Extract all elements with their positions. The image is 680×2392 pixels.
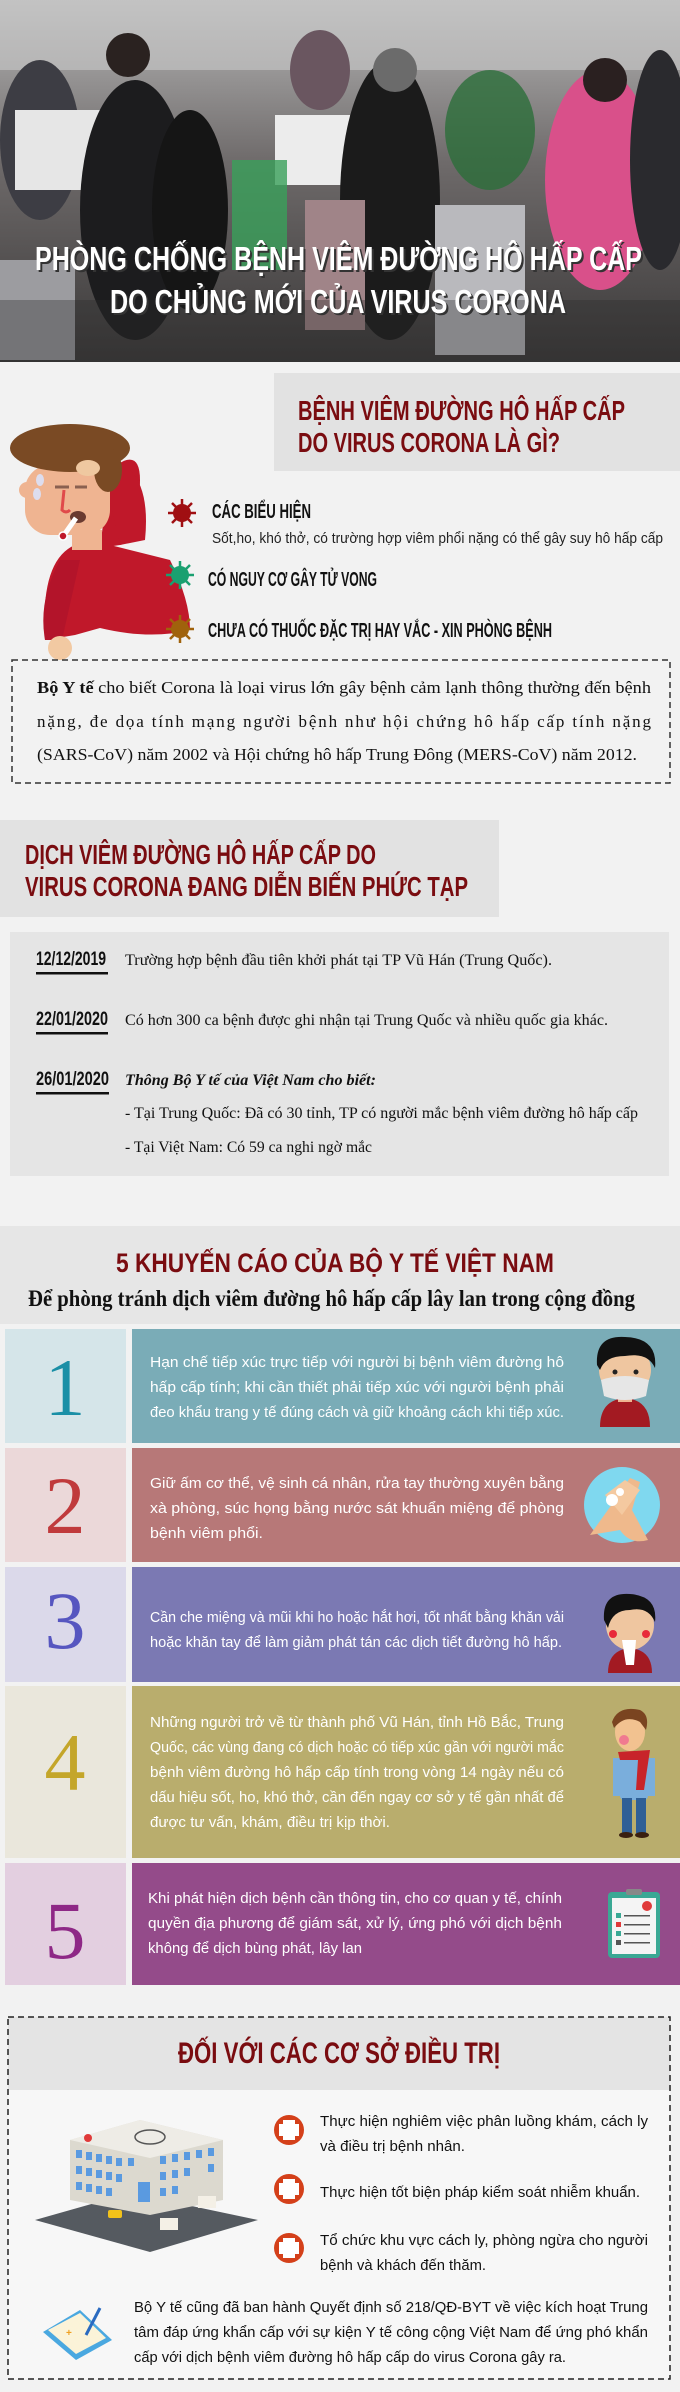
timeline item 1: Trường hợp bệnh đầu tiên khởi phát tại TP Vũ Hán (Trung Quốc). xyxy=(125,952,552,969)
icon: sick man with scarf xyxy=(612,1709,655,1838)
panel: recommendation 2: xà phòng, súc họng bằng nước sát khuẩn miệng để phòng xyxy=(150,1500,564,1517)
panel: recommendation 4 xyxy=(5,1686,680,1858)
callout: ministry statement: nặng, đe dọa tính mạng người bệnh như hội chứng hô hấp cấp tính nặng xyxy=(37,712,652,731)
panel: recommendation 1: Hạn chế tiếp xúc trực tiếp với người bị bệnh viêm đường hô xyxy=(150,1354,564,1371)
timeline item 3 xyxy=(36,1069,638,1156)
icon: document with pen: + xyxy=(66,2328,72,2339)
bullet: mortality: CÓ NGUY CƠ GÂY TỬ VONG xyxy=(208,567,377,591)
panel: recommendation 2 xyxy=(5,1448,680,1562)
icon: clipboard xyxy=(608,1889,660,1958)
icon: green virus xyxy=(166,561,194,589)
icon: brown virus xyxy=(166,615,194,643)
callout: ministry statement: (SARS-CoV) năm 2002 và Hội chứng hô hấp Trung Đông (MERS-CoV) năm 2012. xyxy=(37,745,637,764)
illustration: hospital xyxy=(35,2120,258,2252)
heading: treatment facilities: ĐỐI VỚI CÁC CƠ SỞ ĐIỀU TRỊ xyxy=(178,2036,500,2070)
panel: recommendation 5: Khi phát hiện dịch bệnh cần thông tin, cho cơ quan y tế, chính xyxy=(148,1890,562,1907)
timeline item 1 xyxy=(36,949,552,974)
text: decision 218: Bộ Y tế cũng đã ban hành Quyết định số 218/QĐ-BYT về việc kích hoạt Trung xyxy=(134,2299,648,2316)
icon: red virus xyxy=(168,499,196,527)
icon: boy with mask xyxy=(597,1337,655,1427)
panel: recommendation 4: 4 xyxy=(44,1717,86,1808)
icon: boy sneezing xyxy=(604,1594,655,1673)
panel: recommendation 4: dấu hiệu sốt, ho, khó thở, cần đến ngay cơ sở y tế gần nhất để xyxy=(150,1789,564,1806)
bullet: symptoms xyxy=(212,499,663,547)
illustration: sick person xyxy=(10,424,190,660)
panel: recommendation 3: Cần che miệng và mũi khi ho hoặc hắt hơi, tốt nhất bằng khăn vải xyxy=(150,1609,564,1626)
text: decision 218: cấp với dịch bệnh viêm đường hô hấp cấp do virus Corona gây ra. xyxy=(134,2349,566,2366)
heading: epidemic complex: DỊCH VIÊM ĐƯỜNG HÔ HẤP CẤP DO xyxy=(25,838,376,870)
timeline item 3: - Tại Trung Quốc: Đã có 30 tỉnh, TP có người mắc bệnh viêm đường hô hấp cấp xyxy=(125,1105,638,1122)
callout: ministry statement: Bộ Y tế cho biết Corona là loại virus lớn gây bệnh cảm lạnh thông thường đến bệnh xyxy=(37,678,652,697)
panel: recommendation 5: 5 xyxy=(44,1885,86,1976)
text: measure 3: bệnh và khách đến thăm. xyxy=(320,2257,486,2274)
icon: document with pen xyxy=(43,2308,112,2360)
timeline item 2: Có hơn 300 ca bệnh được ghi nhận tại Trung Quốc và nhiều quốc gia khác. xyxy=(125,1012,608,1029)
panel: recommendation 5: quyền địa phương để giám sát, xử lý, ứng phó với dịch bệnh xyxy=(148,1915,562,1932)
text: measure 1: và điều trị bệnh nhân. xyxy=(320,2138,465,2155)
timeline item 3: Thông Bộ Y tế của Việt Nam cho biết: xyxy=(125,1072,376,1089)
panel: recommendation 4: Quốc, các vùng đang có dịch hoặc có tiếp xúc gần với người mắc xyxy=(150,1739,564,1756)
title xyxy=(35,239,644,322)
panel: recommendation 4: Những người trở về từ thành phố Vũ Hán, tỉnh Hồ Bắc, Trung xyxy=(150,1714,564,1731)
bullet: symptoms: CÁC BIỂU HIỆN xyxy=(212,499,311,523)
header photo xyxy=(0,0,680,362)
heading: what is corona: DO VIRUS CORONA LÀ GÌ? xyxy=(298,427,560,458)
panel: recommendation 2: bệnh viêm phổi. xyxy=(150,1525,263,1542)
icon: plus 2 xyxy=(274,2174,304,2204)
text: measure 2: Thực hiện tốt biện pháp kiểm soát nhiễm khuẩn. xyxy=(320,2184,640,2201)
text: measure 1 xyxy=(320,2113,648,2155)
text: decision 218 xyxy=(134,2299,648,2366)
icon: hand washing xyxy=(584,1467,660,1543)
panel: recommendation 5: không để dịch bùng phát, lây lan xyxy=(148,1940,362,1957)
text: decision 218: tâm đáp ứng khẩn cấp với sự kiện Y tế công cộng Việt Nam để ứng phó khẩn xyxy=(134,2324,648,2341)
timeline item 2 xyxy=(36,1009,608,1034)
panel: recommendation 2: 2 xyxy=(44,1460,86,1551)
panel: recommendation 3 xyxy=(5,1567,680,1682)
callout: ministry statement xyxy=(12,660,670,783)
panel: recommendation 4: bệnh viêm đường hô hấp cấp tính trong vòng 14 ngày nếu có xyxy=(150,1764,564,1781)
text: measure 3: Tổ chức khu vực cách ly, phòng ngừa cho người xyxy=(320,2232,648,2249)
panel: recommendation 1: 1 xyxy=(44,1342,86,1433)
panel: recommendation 4: được tư vấn, khám, điều trị kịp thời. xyxy=(150,1814,390,1831)
heading: 5 recommendations: 5 KHUYẾN CÁO CỦA BỘ Y TẾ VIỆT NAM xyxy=(116,1246,554,1278)
heading: 5 recommendations xyxy=(0,1226,680,1324)
heading: epidemic complex: VIRUS CORONA ĐANG DIỄN BIẾN PHỨC TẠP xyxy=(25,871,468,902)
text: measure 3 xyxy=(320,2232,648,2274)
panel: recommendation 1: đeo khẩu trang y tế đúng cách và giữ khoảng cách khi tiếp xúc. xyxy=(150,1404,564,1421)
text: measure 1: Thực hiện nghiêm việc phân luồng khám, cách ly xyxy=(320,2113,648,2130)
timeline item 3: 26/01/2020 xyxy=(36,1069,109,1090)
panel: recommendation 3: hoặc khăn tay để làm giảm phát tán các dịch tiết đường hô hấp. xyxy=(150,1634,562,1651)
timeline item 3: - Tại Việt Nam: Có 59 ca nghi ngờ mắc xyxy=(125,1139,372,1156)
panel: recommendation 1: hấp cấp tính; khi cần thiết phải tiếp xúc với người bệnh phải xyxy=(150,1379,564,1396)
timeline item 1: 12/12/2019 xyxy=(36,949,106,970)
panel: timeline xyxy=(10,932,669,1176)
icon: plus 3 xyxy=(274,2233,304,2263)
panel: recommendation 5 xyxy=(5,1863,680,1985)
heading: epidemic complex xyxy=(0,820,499,917)
heading: what is corona xyxy=(274,373,680,471)
panel: recommendation 1 xyxy=(5,1329,680,1443)
panel: recommendation 3: 3 xyxy=(44,1575,86,1666)
panel: recommendation 2: Giữ ấm cơ thể, vệ sinh cá nhân, rửa tay thường xuyên bằng xyxy=(150,1475,564,1492)
panel: treatment facilities xyxy=(8,2017,670,2379)
icon: plus 1 xyxy=(274,2115,304,2145)
timeline item 2: 22/01/2020 xyxy=(36,1009,108,1030)
